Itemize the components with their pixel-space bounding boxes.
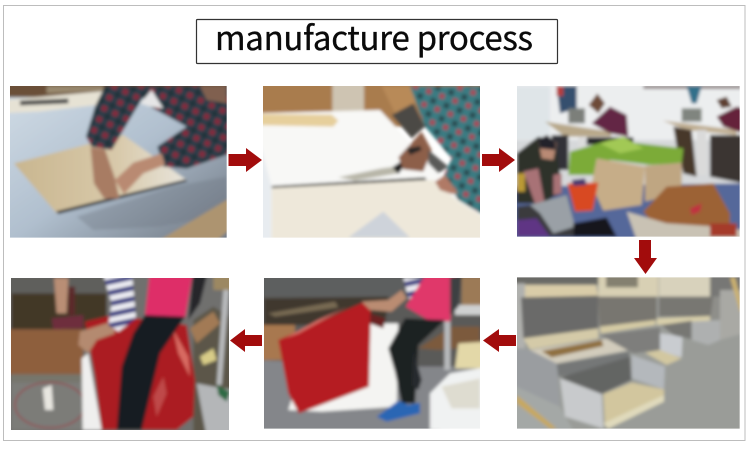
- arrow: step 4 to step 5: [483, 329, 516, 352]
- scene 6: [11, 278, 229, 430]
- scene 1: [10, 86, 227, 238]
- title: [196, 12, 558, 64]
- photo 6: stapling the red cover shut: [11, 278, 229, 430]
- scene 3: [517, 86, 740, 237]
- photo 5: pulling a red cover over the foam cushion: [264, 278, 480, 429]
- title box: [196, 20, 558, 64]
- scene 4: [517, 277, 740, 429]
- photo 3: sewing workshop: [517, 86, 740, 237]
- arrow: step 3 to step 4: [634, 240, 657, 274]
- scene 2: [263, 86, 480, 238]
- photo 2: cutting with scissors: [263, 86, 480, 238]
- photo 4: wooden sofa frames: [517, 277, 740, 429]
- arrow: step 2 to step 3: [482, 148, 515, 172]
- scene 5: [264, 278, 480, 429]
- arrow: step 5 to step 6: [230, 329, 262, 352]
- arrow: step 1 to step 2: [228, 148, 262, 172]
- title text: manufacture process: [215, 12, 533, 60]
- photo 1: tracing a cardboard template on the table: [10, 86, 227, 238]
